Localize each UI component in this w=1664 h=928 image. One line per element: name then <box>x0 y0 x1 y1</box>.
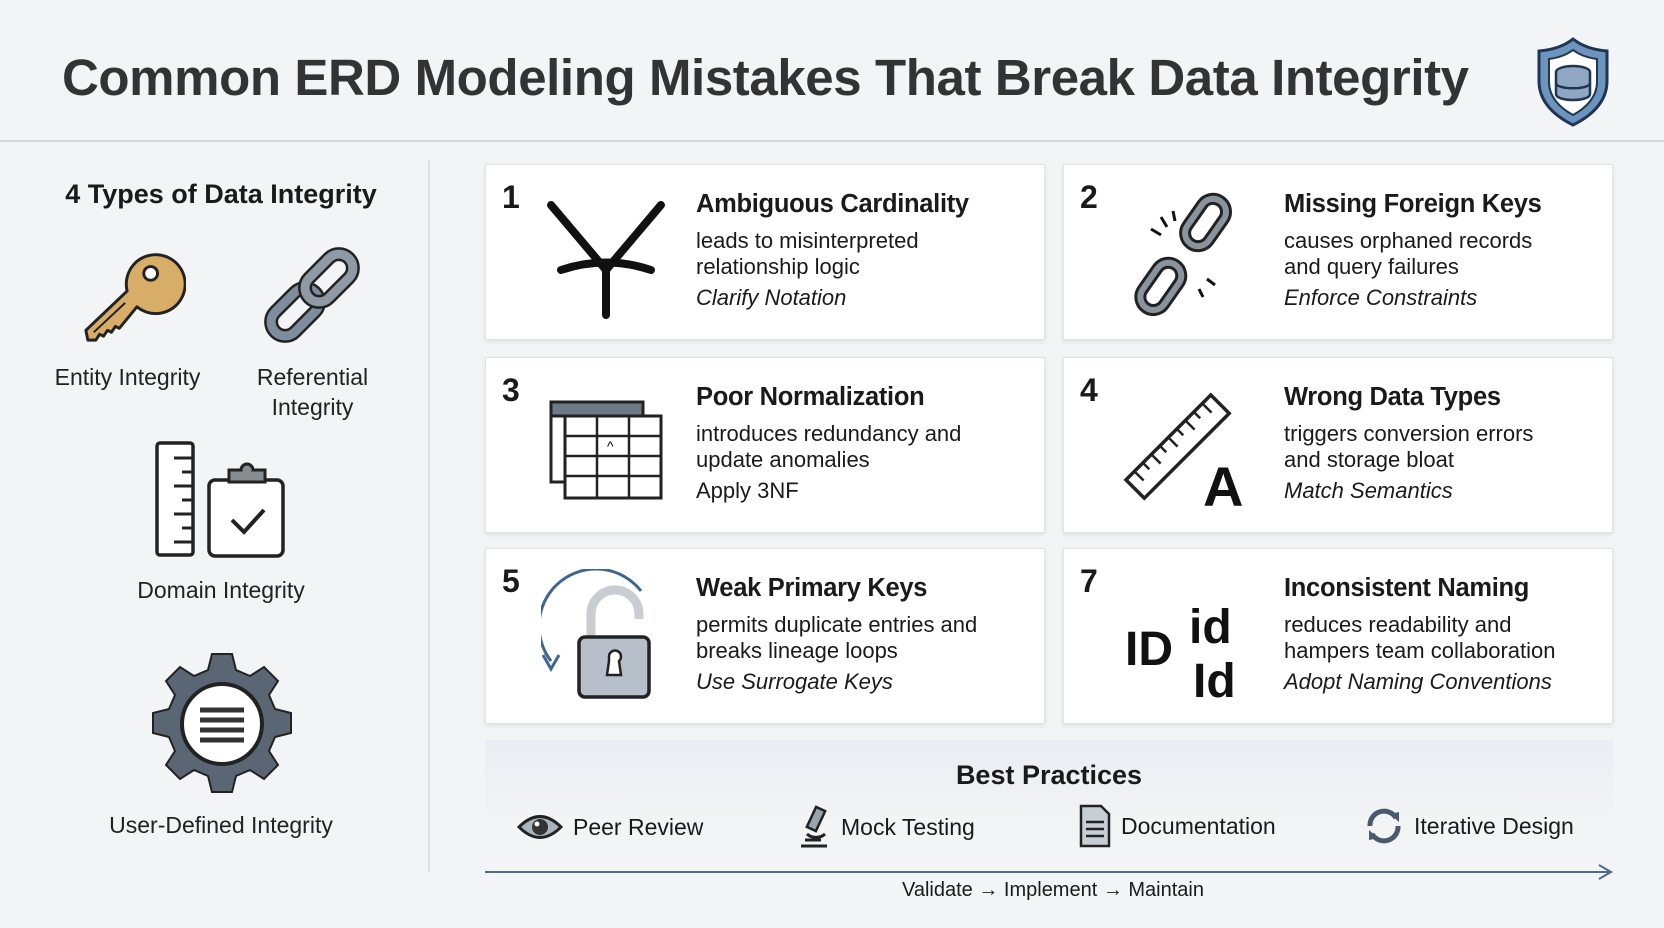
card 7: inconsistent naming: hampers team collaboration <box>1284 638 1555 663</box>
card 1: ambiguous cardinality: relationship logic <box>696 254 860 279</box>
card 5: weak primary keys: permits duplicate entries and <box>696 612 977 637</box>
item: iterative design: Iterative Design <box>1414 812 1574 838</box>
label: entity integrity: Entity Integrity <box>55 364 200 390</box>
caption: validate implement maintain: Validate → Implement → Maintain <box>902 879 1204 901</box>
icon: ruler and clipboard <box>155 441 285 558</box>
icon: tables: ^ <box>607 438 614 454</box>
card 7: inconsistent naming: 7 <box>1080 563 1098 599</box>
icon: ID id Id <box>1125 601 1236 705</box>
card 4: wrong data types: triggers conversion errors <box>1284 421 1533 446</box>
icon: broken chain <box>1134 192 1232 316</box>
panel: 4 types of data integrity <box>55 179 377 838</box>
card 5: weak primary keys: 5 <box>502 563 520 599</box>
card 5: weak primary keys: Use Surrogate Keys <box>696 669 893 694</box>
panel: best practices <box>485 740 1613 865</box>
card 2: missing foreign keys: and query failures <box>1284 254 1459 279</box>
icon: shield database <box>1538 37 1608 127</box>
card 2: missing foreign keys: Enforce Constraints <box>1284 285 1477 310</box>
card 4: wrong data types: Match Semantics <box>1284 478 1453 503</box>
card 2: missing foreign keys: causes orphaned records <box>1284 228 1532 253</box>
card 1: ambiguous cardinality <box>485 164 1045 340</box>
card 1: ambiguous cardinality: leads to misinterpreted <box>696 228 919 253</box>
card 1: ambiguous cardinality: Clarify Notation <box>696 285 846 310</box>
card 3: poor normalization: Poor Normalization <box>696 383 924 411</box>
card 5: weak primary keys <box>485 548 1045 724</box>
item: documentation <box>1080 804 1276 848</box>
card 5: weak primary keys: breaks lineage loops <box>696 638 898 663</box>
icon: tables <box>550 400 662 500</box>
icon: padlock <box>541 569 651 699</box>
card 3: poor normalization: update anomalies <box>696 447 870 472</box>
heading: Best Practices <box>956 760 1142 790</box>
item: peer review <box>517 814 704 840</box>
card 3: poor normalization: introduces redundancy and <box>696 421 961 446</box>
card 3: poor normalization: 3 <box>502 372 520 408</box>
icon: key <box>84 253 186 342</box>
card 5: weak primary keys: Weak Primary Keys <box>696 574 927 602</box>
card 4: wrong data types: Wrong Data Types <box>1284 383 1501 411</box>
item: mock testing <box>801 805 975 848</box>
card 4: wrong data types: and storage bloat <box>1284 447 1454 472</box>
label: domain integrity: Domain Integrity <box>137 577 305 603</box>
item: documentation: Documentation <box>1121 812 1276 838</box>
arrow: timeline <box>485 864 1613 880</box>
card 7: inconsistent naming: reduces readability and <box>1284 612 1511 637</box>
card 1: ambiguous cardinality: Ambiguous Cardinality <box>696 190 969 218</box>
icon: ID id Id: id <box>1189 601 1232 654</box>
card 4: wrong data types: 4 <box>1080 372 1098 408</box>
label: referential integrity: Integrity <box>272 394 353 420</box>
card 2: missing foreign keys: 2 <box>1080 179 1098 215</box>
heading: 4 Types of Data Integrity <box>65 179 377 209</box>
item: iterative design <box>1367 808 1574 844</box>
icon: chain <box>264 247 360 343</box>
card 1: ambiguous cardinality: 1 <box>502 179 520 215</box>
label: referential integrity <box>257 364 368 420</box>
icon: ruler and A <box>1124 392 1243 514</box>
card 3: poor normalization: Apply 3NF <box>696 478 799 503</box>
label: user-defined integrity: User-Defined Integrity <box>109 812 333 838</box>
card 7: inconsistent naming <box>1063 548 1613 724</box>
label: referential integrity: Referential <box>257 364 368 390</box>
card 7: inconsistent naming: Inconsistent Naming <box>1284 574 1529 602</box>
icon: ID id Id: ID <box>1125 623 1173 676</box>
icon: gear <box>152 653 292 793</box>
card 2: missing foreign keys <box>1063 164 1613 340</box>
card 4: wrong data types <box>1063 357 1613 533</box>
item: mock testing: Mock Testing <box>841 814 975 840</box>
icon: crow's foot <box>547 201 665 319</box>
item: peer review: Peer Review <box>573 814 703 840</box>
card 3: poor normalization <box>485 357 1045 533</box>
card 2: missing foreign keys: Missing Foreign Keys <box>1284 190 1542 218</box>
title: Common ERD Modeling Mistakes That Break Data Integrity <box>62 49 1469 106</box>
card 7: inconsistent naming: Adopt Naming Conventions <box>1284 669 1552 694</box>
